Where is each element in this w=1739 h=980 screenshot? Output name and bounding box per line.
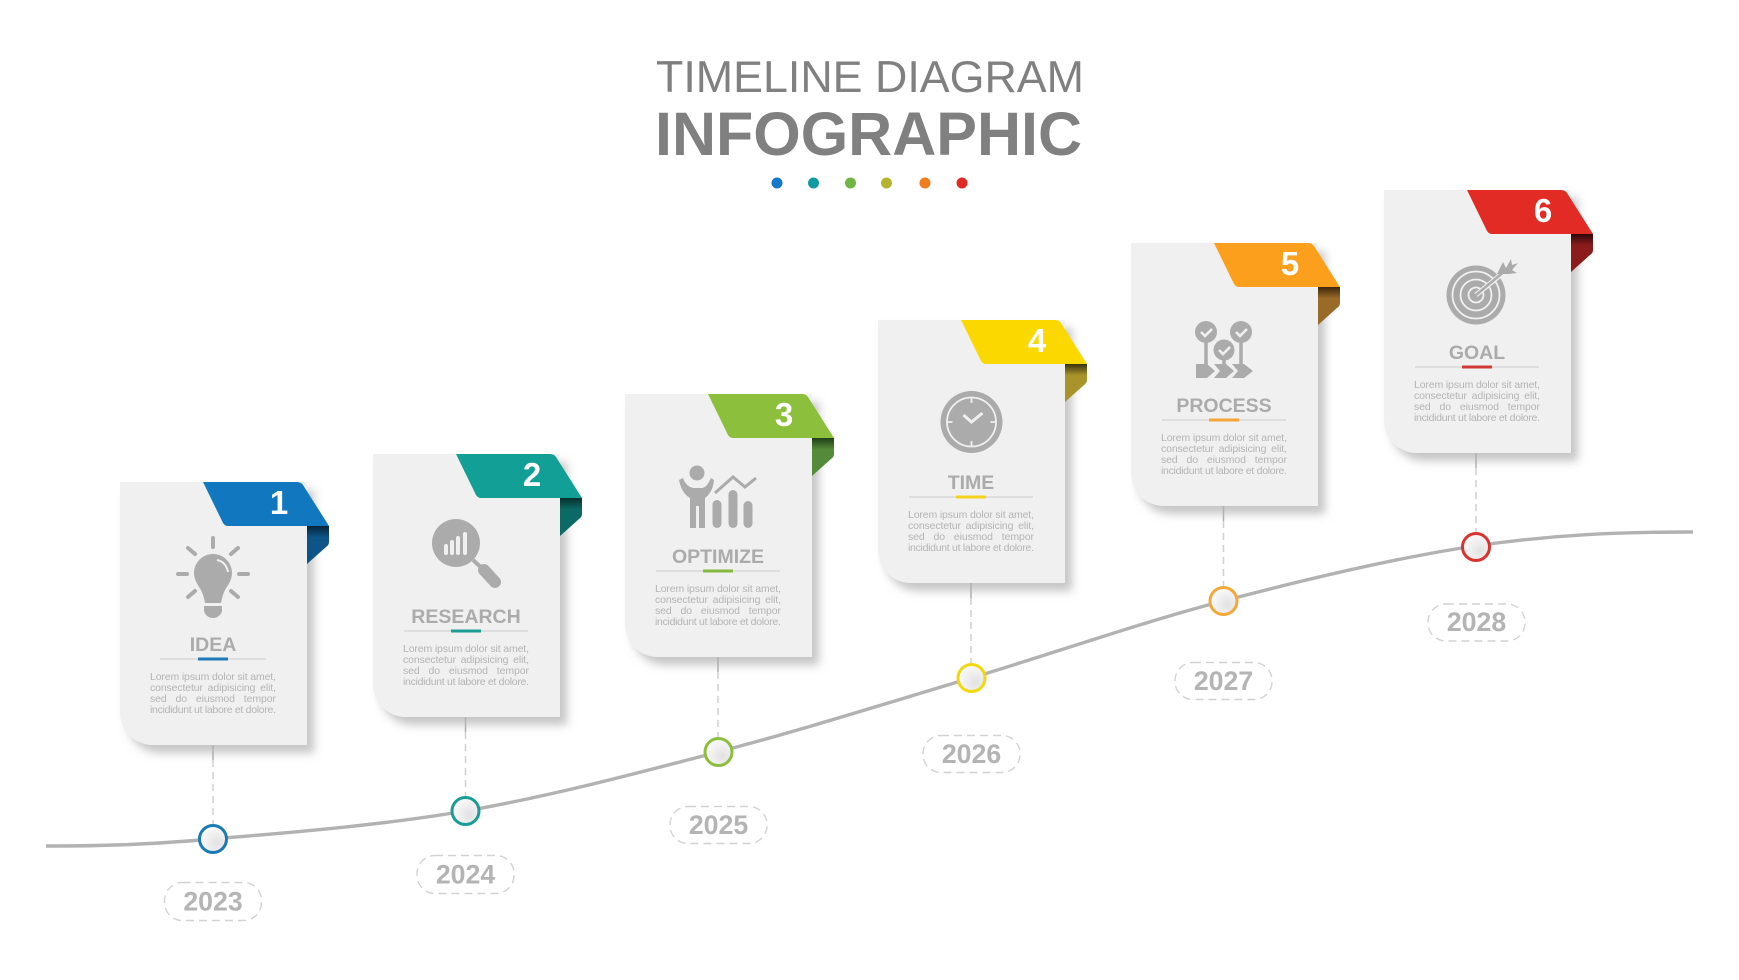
label: OPTIMIZE xyxy=(672,546,764,568)
year 2028 xyxy=(1428,604,1525,641)
timeline curve xyxy=(46,532,1693,846)
icon: process milestones xyxy=(1195,321,1253,378)
label: GOAL xyxy=(1449,342,1505,364)
body text: incididunt ut labore et dolore. xyxy=(1414,412,1540,424)
ribbon 6: 6 xyxy=(1534,192,1552,229)
body text: sed do eiusmod tempor xyxy=(403,665,530,677)
panel: step 6 goal xyxy=(1384,190,1593,453)
icon: magnifier chart xyxy=(432,519,495,582)
label: RESEARCH xyxy=(411,606,521,628)
divider xyxy=(909,496,1033,498)
divider xyxy=(656,570,780,572)
panel: step 5 process xyxy=(1131,243,1340,506)
body text: Lorem ipsum dolor sit amet, xyxy=(403,643,529,655)
year 2027 xyxy=(1175,662,1272,700)
icon: light bulb xyxy=(178,538,248,618)
ribbon 3: 3 xyxy=(775,396,793,433)
panel: step 3 optimize xyxy=(625,394,834,657)
body text: Lorem ipsum dolor sit amet, xyxy=(150,671,276,683)
body text: sed do eiusmod tempor xyxy=(655,605,782,617)
title: TIMELINE DIAGRAM xyxy=(656,53,1084,102)
colour dots xyxy=(772,178,968,188)
ribbon 6 xyxy=(1467,190,1593,272)
body text: consectetur adipisicing elit, xyxy=(150,682,276,694)
ribbon 2 xyxy=(456,454,582,536)
label: PROCESS xyxy=(1176,395,1272,417)
connector and marker 2024 xyxy=(452,717,479,824)
divider xyxy=(1162,418,1286,422)
icon: person with chart xyxy=(679,466,756,528)
ribbon 5: 5 xyxy=(1281,245,1299,282)
body text: consectetur adipisicing elit, xyxy=(655,594,781,606)
body text xyxy=(908,509,1034,554)
title xyxy=(655,53,1084,168)
body text xyxy=(1161,432,1288,477)
body text: incididunt ut labore et dolore. xyxy=(655,616,781,628)
divider xyxy=(404,630,528,632)
body text: sed do eiusmod tempor xyxy=(150,693,276,705)
connector and marker 2025 xyxy=(705,657,732,766)
body text: consectetur adipisicing elit, xyxy=(403,654,529,666)
panel: step 2 research xyxy=(373,454,582,717)
ribbon 1 xyxy=(203,482,329,564)
year 2026 xyxy=(923,736,1020,772)
body text: sed do eiusmod tempor xyxy=(1414,401,1540,413)
year 2023 xyxy=(164,882,262,920)
title: INFOGRAPHIC xyxy=(655,100,1082,168)
year 2024: 2024 xyxy=(436,860,495,890)
icon: clock xyxy=(940,391,1002,453)
ribbon 2: 2 xyxy=(523,456,541,493)
body text: Lorem ipsum dolor sit amet, xyxy=(1161,432,1287,444)
panel: step 1 idea xyxy=(120,482,329,745)
year 2024 xyxy=(417,856,514,894)
connector and marker 2027 xyxy=(1210,506,1237,614)
body text xyxy=(1414,379,1540,424)
body text xyxy=(403,643,530,688)
body text: incididunt ut labore et dolore. xyxy=(908,542,1034,554)
divider xyxy=(160,658,266,660)
year 2025 xyxy=(670,806,767,844)
ribbon 1: 1 xyxy=(270,484,288,521)
ribbon 4 xyxy=(961,320,1087,402)
ribbon 4: 4 xyxy=(1028,322,1047,359)
icon: target with arrow xyxy=(1446,259,1518,324)
body text: sed do eiusmod tempor xyxy=(908,531,1034,543)
body text: Lorem ipsum dolor sit amet, xyxy=(1414,379,1540,391)
body text: sed do eiusmod tempor xyxy=(1161,454,1288,466)
body text: consectetur adipisicing elit, xyxy=(1161,443,1287,455)
body text: incididunt ut labore et dolore. xyxy=(1161,465,1287,477)
body text xyxy=(150,671,276,716)
label: TIME xyxy=(948,472,994,494)
body text: consectetur adipisicing elit, xyxy=(908,520,1034,532)
connector and marker 2026 xyxy=(958,583,985,692)
ribbon 3 xyxy=(708,394,834,476)
panel: step 4 time xyxy=(878,320,1087,583)
body text: incididunt ut labore et dolore. xyxy=(403,676,529,688)
year 2028: 2028 xyxy=(1447,607,1506,637)
divider xyxy=(1415,366,1539,368)
year 2023: 2023 xyxy=(183,886,243,916)
connector and marker 2023 xyxy=(200,745,226,852)
body text xyxy=(655,583,782,628)
year 2026: 2026 xyxy=(942,739,1001,769)
connector and marker 2028 xyxy=(1462,453,1490,560)
ribbon 5 xyxy=(1214,243,1340,325)
body text: Lorem ipsum dolor sit amet, xyxy=(655,583,781,595)
body text: incididunt ut labore et dolore. xyxy=(150,704,276,716)
body text: consectetur adipisicing elit, xyxy=(1414,390,1540,402)
label: IDEA xyxy=(190,634,236,656)
year 2027: 2027 xyxy=(1194,666,1253,696)
year 2025: 2025 xyxy=(689,810,748,840)
body text: Lorem ipsum dolor sit amet, xyxy=(908,509,1034,521)
